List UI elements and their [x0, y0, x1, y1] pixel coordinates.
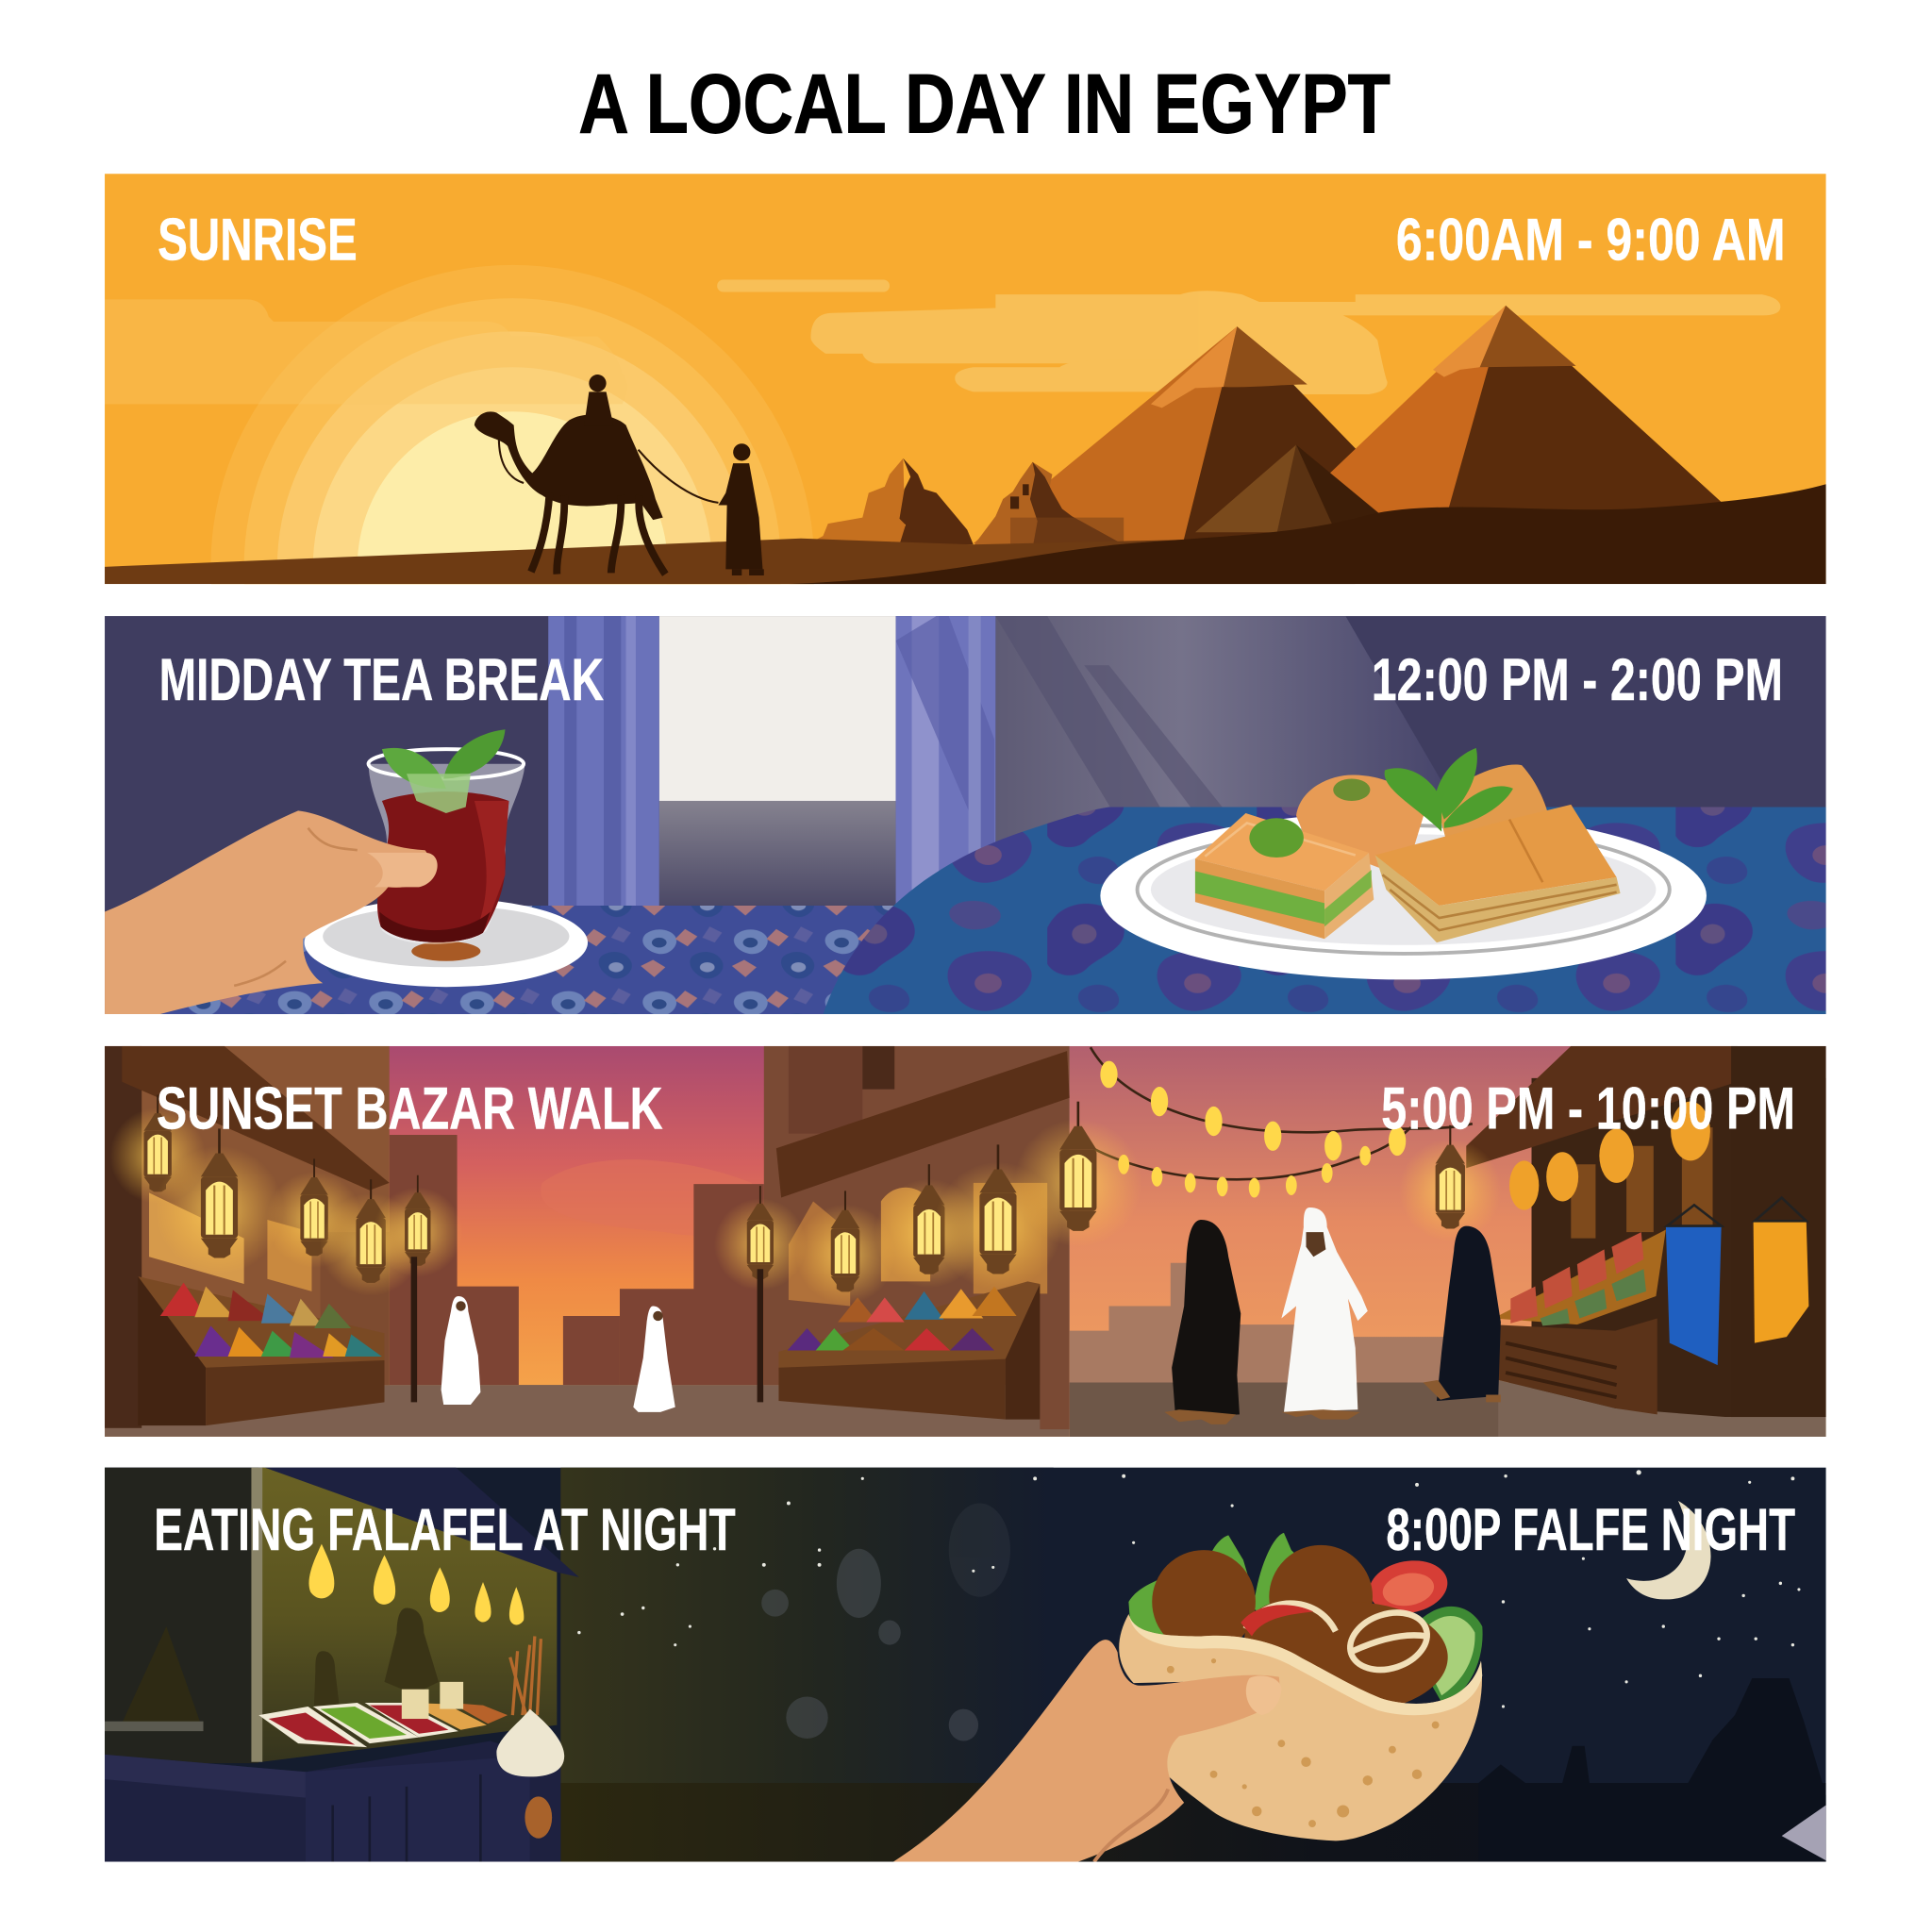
right dark column [1731, 1046, 1826, 1417]
baklava: back pieces [1296, 765, 1550, 877]
night ground [560, 1783, 1826, 1862]
lantern [1014, 1102, 1142, 1247]
camel with rider [475, 375, 718, 575]
title: A LOCAL DAY IN EGYPT [578, 58, 1391, 151]
lantern [934, 1144, 1062, 1291]
lantern [320, 1179, 422, 1296]
stall: vendor silhouettes [313, 1607, 439, 1732]
time: sunrise: 6:00AM - 9:00 AM [1396, 208, 1786, 274]
stepped pyramid: left [808, 458, 974, 544]
lantern [795, 1191, 895, 1305]
stall: center spices [778, 1281, 1040, 1420]
awning: left [122, 1046, 390, 1191]
pyramid: middle [974, 326, 1356, 543]
awning: center [776, 1051, 1070, 1198]
lantern [874, 1164, 984, 1288]
falafel balls [1152, 1545, 1448, 1713]
pyramid: small front [1195, 445, 1389, 537]
stall: right goods [1492, 1230, 1666, 1414]
stall: awning [105, 1466, 579, 1577]
baklava: left piece [1195, 813, 1374, 939]
plate [1100, 812, 1707, 979]
stall: food trays [258, 1682, 508, 1747]
string lights [1079, 1047, 1473, 1198]
lantern [156, 1128, 283, 1274]
time: midday tea break: 12:00 PM - 2:00 PM [1372, 647, 1783, 713]
stall: left spices [138, 1276, 385, 1425]
tahini swirl [1245, 1604, 1435, 1679]
panel: sunset bazar walk [105, 1046, 1826, 1437]
lamp post center [758, 1269, 762, 1402]
tablecloth: right [823, 808, 1826, 1014]
ground right [1070, 1382, 1541, 1437]
stall: back wall [261, 1466, 557, 1762]
label: sunrise: SUNRISE [158, 208, 358, 274]
person: man in white [1281, 1208, 1368, 1420]
pita wrap [1119, 1614, 1482, 1840]
tomato [1365, 1555, 1452, 1620]
window [659, 616, 896, 907]
lettuce [1128, 1533, 1308, 1654]
stall: hanging tassel [525, 1796, 552, 1839]
lantern [1399, 1125, 1502, 1241]
stall: sack with sticks [496, 1637, 564, 1776]
person: woman in black left [1164, 1220, 1241, 1424]
sun with glow rings [211, 265, 814, 585]
curtain: left [548, 616, 659, 907]
silhouettes right [1478, 1678, 1826, 1874]
panel: midday tea break [105, 616, 1826, 1014]
light rays [996, 616, 1441, 841]
right side skyline [1070, 1263, 1497, 1385]
baklava: right piece [1375, 805, 1621, 942]
hand holding falafel [893, 1640, 1281, 1862]
red pepper [1241, 1605, 1313, 1637]
label: sunset bazar walk: SUNSET BAZAR WALK [157, 1075, 663, 1141]
lantern [373, 1175, 462, 1277]
dim background discs [761, 1503, 1010, 1741]
panel: sunrise [105, 174, 1826, 585]
label: midday tea break: MIDDAY TEA BREAK [158, 647, 604, 713]
ground: back dune [105, 539, 1356, 584]
building: center [764, 1046, 1070, 1429]
ground left [105, 1385, 1070, 1437]
lantern [109, 1094, 206, 1204]
person: woman in black right [1424, 1226, 1501, 1402]
distant skyline left [390, 1135, 764, 1385]
building: left [105, 1046, 390, 1428]
clouds [105, 279, 1780, 404]
person: small white center [633, 1306, 675, 1412]
panel: eating falafel at night [105, 1466, 1826, 1874]
lamp post left [411, 1257, 416, 1402]
curtain: right [896, 616, 995, 907]
cucumber [1405, 1607, 1483, 1707]
person: small white left [441, 1296, 480, 1405]
hanging cloth: orange [1754, 1198, 1808, 1343]
label: eating falafel at night: EATING FALAFEL AT NIGHT [154, 1497, 736, 1563]
time: night: 8:00P FALFE NIGHT [1386, 1497, 1795, 1563]
hand holding tea [105, 810, 438, 1014]
hanging cloth: blue [1666, 1205, 1722, 1365]
sky streaks [564, 1160, 713, 1172]
lantern [266, 1158, 362, 1268]
hanging amber lanterns [1509, 1102, 1710, 1210]
stepped pyramid: right [974, 462, 1124, 548]
tea glass [369, 729, 525, 944]
time: sunset bazar walk: 5:00 PM - 10:00 PM [1381, 1075, 1795, 1141]
tablecloth: left [124, 906, 899, 1014]
moon [1626, 1501, 1711, 1599]
stall: post [251, 1468, 262, 1762]
awning: right [1466, 1046, 1738, 1168]
ground: front dune [789, 484, 1826, 584]
stall: light bulbs [308, 1544, 524, 1624]
stall: counter [105, 1741, 560, 1862]
stall: left side [105, 1468, 258, 1763]
lantern [714, 1186, 807, 1291]
building: right wall [1498, 1078, 1826, 1437]
stars [183, 1470, 1801, 1708]
grey corner wedge [1782, 1805, 1826, 1860]
guide figure [718, 443, 764, 575]
pyramid: large right [1330, 306, 1721, 513]
saucer [305, 898, 588, 987]
mint sprig [1385, 748, 1513, 832]
